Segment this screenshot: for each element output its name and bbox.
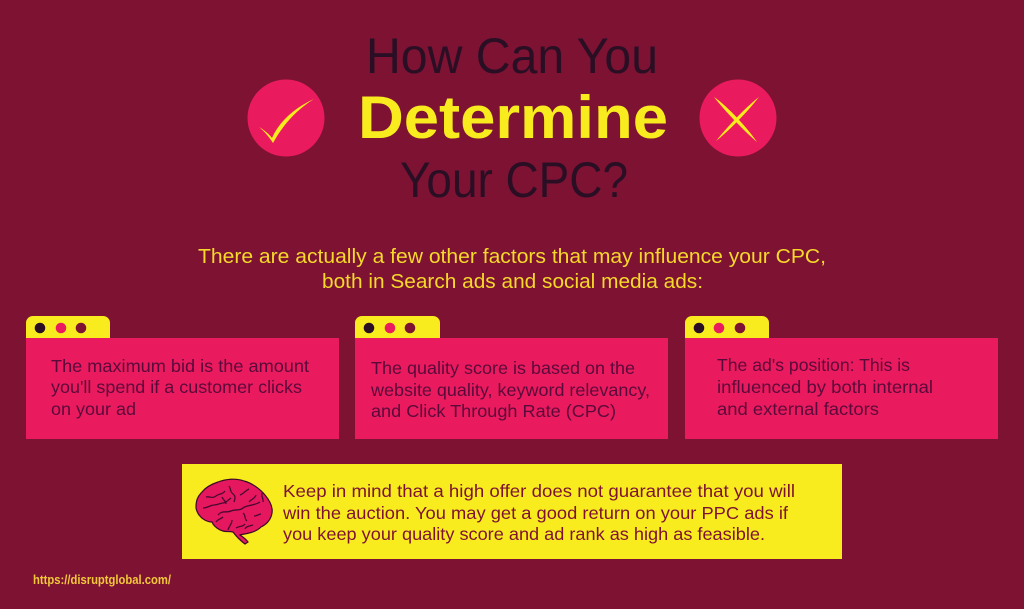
panel: maximum bid	[26, 316, 339, 439]
panel: quality score	[355, 316, 668, 439]
intro text: both in Search ads and social media ads:	[322, 271, 703, 293]
intro text	[198, 246, 826, 293]
panel: ad position: The ad's position: This is	[717, 355, 910, 375]
source url: https://disruptglobal.com/	[33, 572, 171, 587]
panel: ad position	[685, 316, 998, 439]
panel: quality score: and Click Through Rate (CPC)	[371, 401, 616, 421]
callout: win the auction. You may get a good return on your PPC ads if	[282, 503, 788, 523]
callout: you keep your quality score and ad rank as high as feasible.	[283, 524, 765, 544]
icon: check mark circle	[248, 80, 324, 156]
panel: quality score: website quality, keyword relevancy,	[370, 380, 650, 400]
title: Your CPC?	[400, 152, 628, 208]
intro text: There are actually a few other factors that may influence your CPC,	[198, 246, 826, 268]
panel: ad position: influenced by both internal	[717, 377, 933, 397]
panel: quality score: The quality score is based on the	[371, 358, 635, 378]
icon: cross circle	[700, 80, 776, 156]
title: How Can You	[366, 28, 658, 84]
callout	[182, 464, 842, 559]
panel: maximum bid: you'll spend if a customer clicks	[51, 377, 302, 397]
icon: brain	[196, 479, 272, 544]
title: Determine	[358, 84, 668, 151]
title	[358, 28, 668, 208]
panel: ad position: and external factors	[717, 399, 879, 419]
panel: maximum bid: The maximum bid is the amount	[51, 356, 309, 376]
panel: maximum bid: on your ad	[51, 399, 136, 419]
callout: Keep in mind that a high offer does not guarantee that you will	[283, 481, 795, 501]
